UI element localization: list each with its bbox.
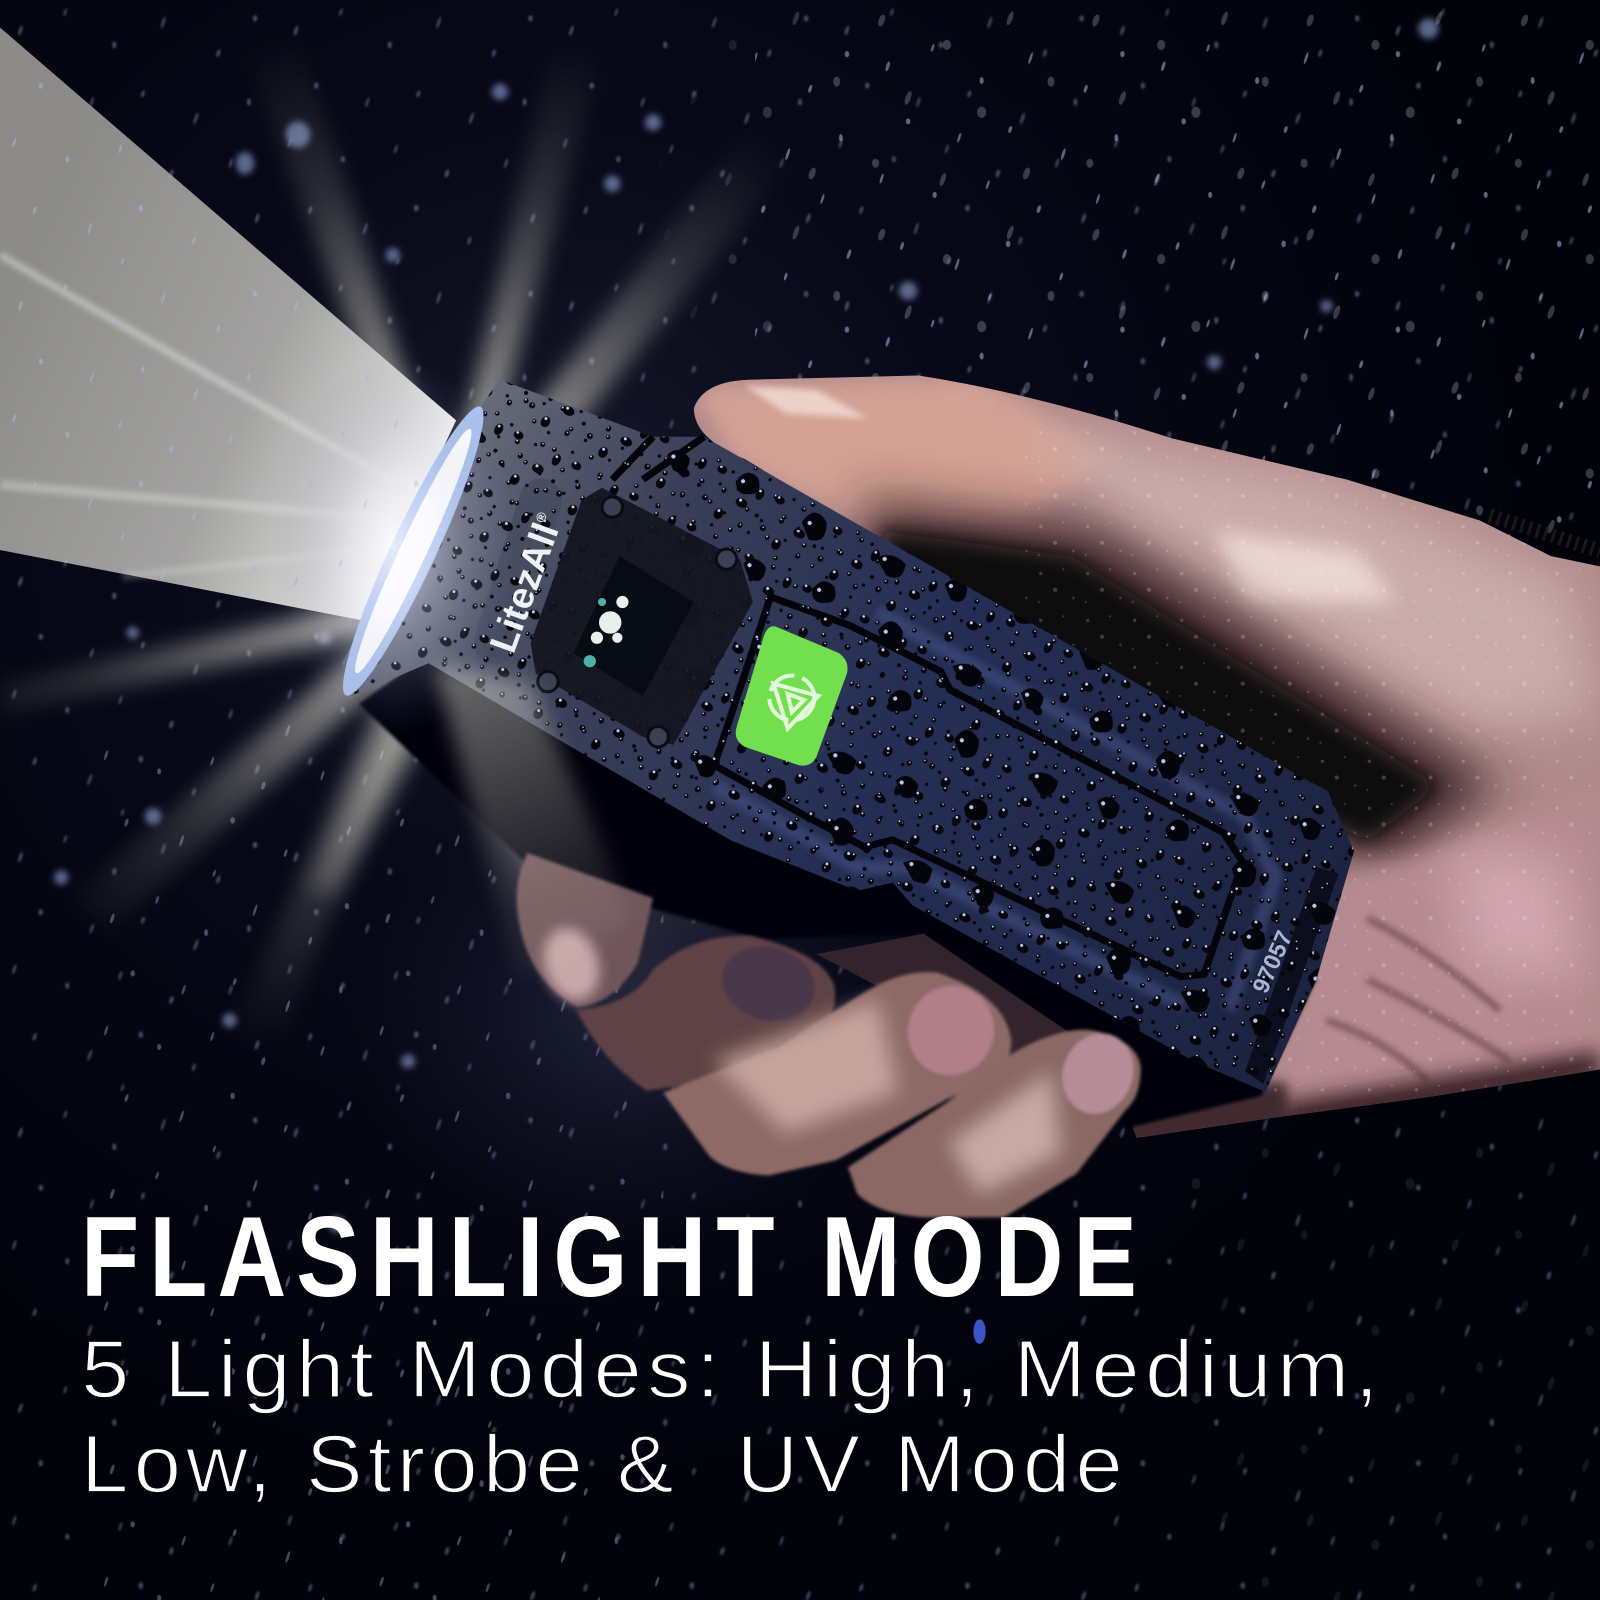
button logo (769, 676, 818, 729)
finger A (517, 853, 653, 1007)
flashlight body surface (342, 380, 1354, 1092)
finger D (848, 1030, 1141, 1217)
light rays (0, 10, 816, 1041)
low glow under the flashlight (347, 786, 918, 1255)
end cap strip (1245, 867, 1339, 1084)
raised ridges (714, 612, 1276, 1010)
water droplets on the body (354, 382, 1354, 1086)
model number: 97057 (1247, 927, 1297, 997)
flashlight (326, 367, 1367, 1133)
subtitle text block (81, 1324, 1384, 1510)
finger C (663, 972, 1011, 1176)
brand label: LitezAll (481, 517, 567, 658)
display screen (573, 556, 694, 696)
rear grip wedge (816, 934, 1082, 1061)
lens glow (270, 357, 515, 735)
screen module (531, 488, 753, 747)
flashlight underside in shadow (359, 653, 1316, 1128)
title: FLASHLIGHT MODE (81, 1194, 1147, 1321)
brand label: ® (533, 510, 550, 524)
brand capsule (495, 500, 541, 643)
panel grooves (612, 437, 1243, 977)
beam streaks (0, 255, 408, 577)
light beam (0, 28, 456, 620)
hand: thumb and palm (694, 376, 1600, 1148)
hand shading (694, 378, 1600, 1148)
green button (736, 626, 848, 766)
subtitle line 2: Low, Strobe & UV Mode (81, 1419, 1128, 1510)
subtitle line 1: 5 Light Modes: High, Medium, (81, 1324, 1384, 1415)
lens (326, 397, 501, 705)
bolts (538, 497, 737, 747)
display icon (584, 596, 629, 667)
finger B (577, 936, 835, 1091)
rain on beam (0, 31, 456, 620)
hand: lower fingers (517, 853, 1145, 1217)
gray ray over the underside (434, 663, 633, 980)
